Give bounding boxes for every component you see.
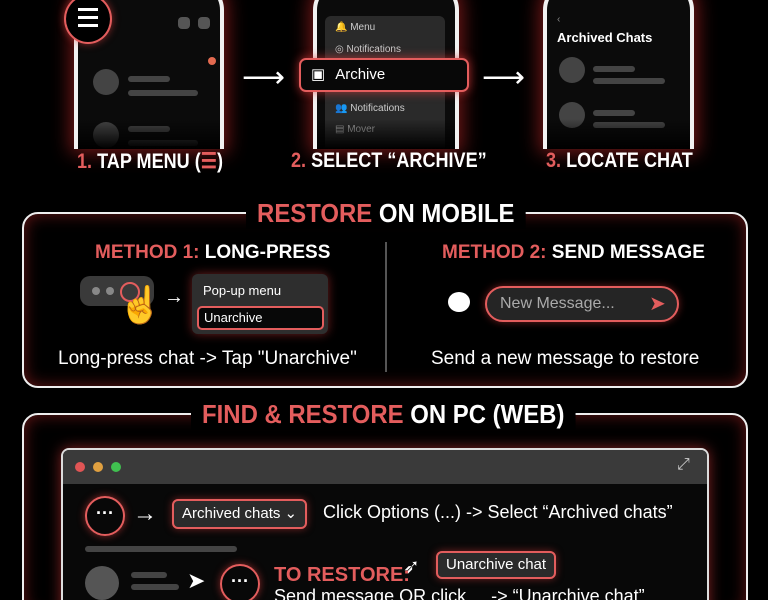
panel: PC web	[22, 413, 748, 600]
popup menu: Pop-up menu	[203, 283, 281, 298]
phone 2: menu: ◎ Notifications	[335, 44, 401, 55]
panel: restore on mobile	[22, 212, 748, 388]
browser window	[61, 448, 709, 600]
browser window: Click Options (...) -> Select “Archived chats”	[323, 502, 673, 522]
phone 2: menu: 👥 Notifications	[335, 103, 405, 114]
browser window: ➤	[187, 568, 205, 593]
label step 2: 2. SELECT “ARCHIVE”	[291, 149, 487, 172]
browser window: ···	[231, 571, 249, 591]
archive highlight	[299, 58, 469, 92]
icon: speech bubble	[448, 292, 470, 312]
method 2 heading: METHOD 2: SEND MESSAGE	[442, 242, 705, 263]
row 1	[85, 496, 125, 536]
arrow: →	[164, 286, 184, 308]
row 2	[85, 566, 119, 600]
browser window: Archived chats ⌄	[182, 505, 297, 522]
browser window: →	[133, 500, 157, 527]
phone 2: menu	[313, 0, 459, 149]
divider	[385, 242, 387, 372]
titlebar	[63, 450, 707, 484]
method 1 heading: METHOD 1: LONG-PRESS	[95, 242, 330, 263]
icon: hamburger menu circle	[64, 0, 112, 44]
title: RESTORE ON MOBILE	[257, 198, 514, 228]
icon: chat bubble with hand: ☝	[118, 284, 163, 325]
popup menu: Unarchive	[204, 310, 263, 325]
phone 2: menu: ▤ Mover	[335, 124, 375, 135]
arrow 2: ⟶	[482, 61, 525, 94]
message input: ➤	[649, 293, 666, 315]
method 1 caption: Long-press chat -> Tap "Unarchive"	[58, 348, 357, 369]
phone 3: archived chats	[543, 0, 694, 149]
arrow 1: ⟶	[242, 61, 285, 94]
title: FIND & RESTORE ON PC (WEB)	[202, 399, 564, 429]
phone 3: archived chats: Archived Chats	[557, 30, 652, 45]
archive highlight: ▣ Archive	[311, 66, 385, 83]
row 1: ···	[96, 503, 114, 523]
icon: chat bubble with hand	[80, 276, 154, 306]
label step 3: 3. LOCATE CHAT	[546, 149, 693, 172]
popup menu	[192, 274, 328, 334]
method 2 caption: Send a new message to restore	[431, 348, 699, 369]
message input: New Message...	[500, 295, 615, 312]
message input	[485, 286, 679, 322]
phone 3: archived chats: ‹	[557, 14, 560, 25]
phone 2: menu: 🔔 Menu	[335, 22, 375, 33]
browser window: TO RESTORE:	[274, 564, 410, 586]
phone 1: tap menu	[74, 0, 224, 149]
titlebar: ⤢	[677, 456, 690, 473]
browser window: ➶	[403, 556, 420, 578]
label step 1: 1. TAP MENU (☰)	[77, 150, 223, 173]
browser window: Unarchive chat	[446, 556, 546, 573]
